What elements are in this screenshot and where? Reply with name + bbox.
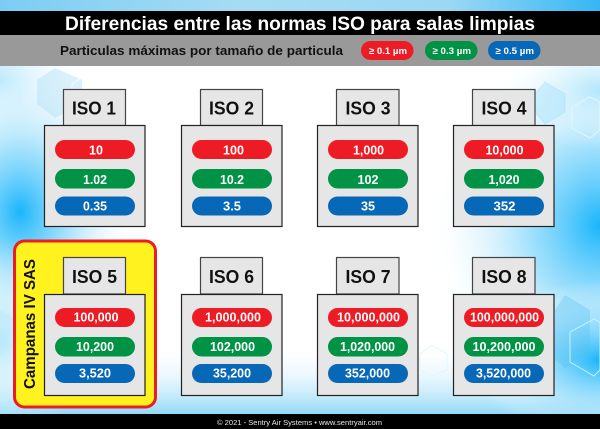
card: ISO 6: 35,200 xyxy=(213,367,251,381)
card: ISO 1: ISO 1 xyxy=(72,98,116,118)
card: ISO 2: 100 xyxy=(223,144,244,158)
card: ISO 4 xyxy=(454,90,554,226)
title bar: Diferencias entre las normas ISO para salas limpias xyxy=(65,13,535,35)
card: ISO 3: ISO 3 xyxy=(346,98,390,118)
card: ISO 3: 1,000 xyxy=(353,144,384,158)
card: ISO 3 xyxy=(318,90,418,226)
legend: 0.3 µm xyxy=(425,41,478,60)
card: ISO 3: 35 xyxy=(361,200,375,214)
card: ISO 1: 10 xyxy=(89,144,103,158)
card: ISO 8: 3,520,000 xyxy=(476,367,531,381)
card: ISO 7 xyxy=(318,258,418,396)
card: ISO 7: ISO 7 xyxy=(346,266,390,287)
card: ISO 5: 100,000 xyxy=(74,311,119,325)
card: ISO 4: 1,020 xyxy=(488,173,520,187)
footer xyxy=(0,414,600,429)
card: ISO 2: ISO 2 xyxy=(209,98,254,118)
card: ISO 8 xyxy=(454,258,554,396)
card: ISO 8: ISO 8 xyxy=(482,266,526,287)
card: ISO 4: 352 xyxy=(494,200,516,214)
card: ISO 6: 1,000,000 xyxy=(205,311,261,325)
card: ISO 3: 102 xyxy=(358,173,379,187)
card: ISO 6 xyxy=(182,258,282,396)
card: ISO 7: 10,000,000 xyxy=(337,311,400,325)
card: ISO 1 xyxy=(44,90,145,226)
card: ISO 8: 100,000,000 xyxy=(470,311,539,325)
card: ISO 2: 10.2 xyxy=(220,173,244,187)
card: ISO 5: 3,520 xyxy=(79,367,111,381)
legend: 0.5 µm: ≥ 0.5 µm xyxy=(496,46,534,57)
legend: 0.1 µm xyxy=(361,41,414,60)
card: ISO 7: 1,020,000 xyxy=(340,340,395,354)
card: ISO 6: ISO 6 xyxy=(209,266,254,287)
card: ISO 2 xyxy=(182,90,282,226)
legend: 0.1 µm: ≥ 0.1 µm xyxy=(369,46,407,57)
card: ISO 8: 10,200,000 xyxy=(472,340,536,354)
legend: 0.5 µm xyxy=(488,41,540,60)
card: ISO 1: 0.35 xyxy=(83,200,107,214)
card: ISO 5 xyxy=(44,258,145,396)
card: ISO 4: ISO 4 xyxy=(482,98,527,118)
card: ISO 2: 3.5 xyxy=(223,200,241,214)
legend bar xyxy=(0,35,600,66)
footer: © 2021 - Sentry Air Systems • www.sentryair.com xyxy=(217,418,382,427)
card: ISO 5: 10,200 xyxy=(76,340,114,354)
card: ISO 5: ISO 5 xyxy=(72,266,117,287)
card: ISO 6: 102,000 xyxy=(210,340,255,354)
subtitle: Particulas máximas por tamaño de particula xyxy=(60,43,344,58)
highlight panel: Campanas IV SAS xyxy=(14,241,156,407)
card: ISO 7: 352,000 xyxy=(345,367,390,381)
legend: 0.3 µm: ≥ 0.3 µm xyxy=(432,46,471,57)
card: ISO 4: 10,000 xyxy=(486,144,524,158)
card: ISO 1: 1.02 xyxy=(83,173,107,187)
highlight panel: Campanas IV SAS: Campanas IV SAS xyxy=(22,259,39,389)
